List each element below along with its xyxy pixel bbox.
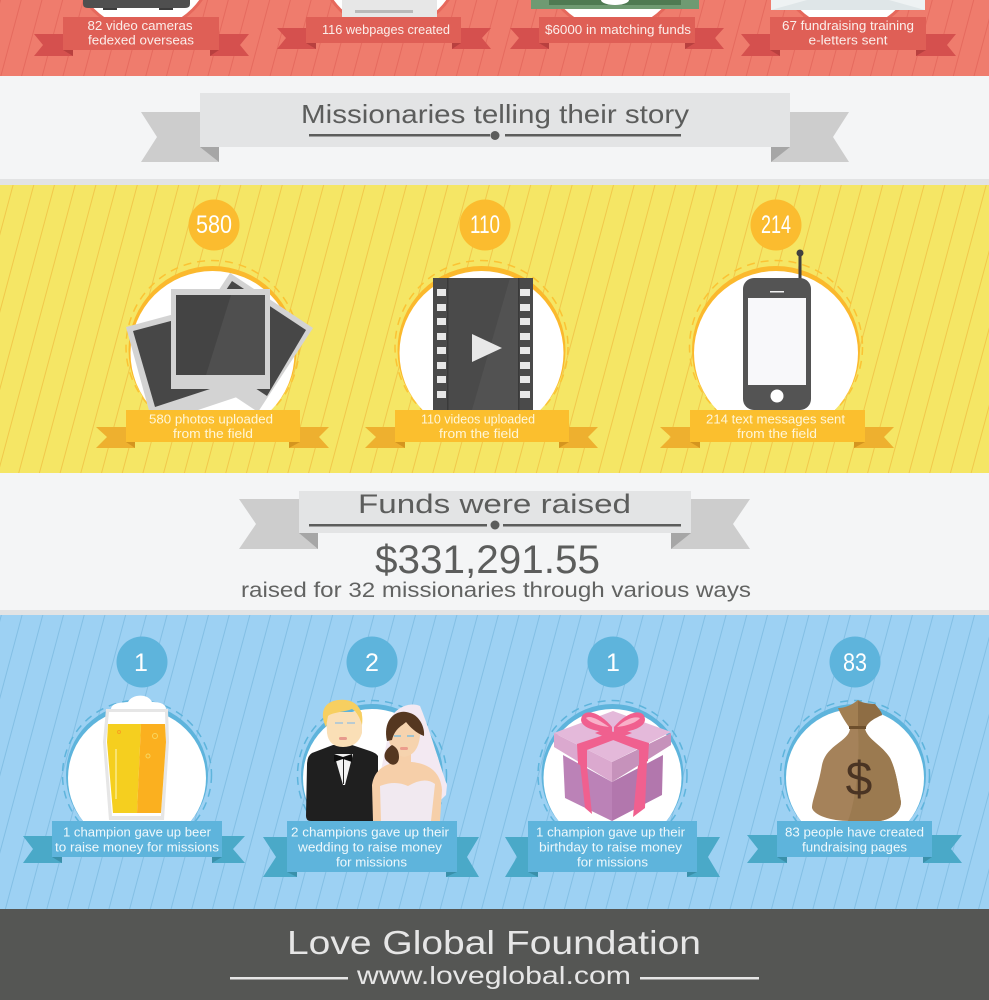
item: webpages [277,0,491,49]
item: gave up beer: 1 champion gave up beer [63,826,211,840]
icon: pint of beer [103,696,169,820]
item: gave up beer: to raise money for missions [55,840,219,854]
item: gave up wedding: for missions [336,856,407,870]
divider band [0,610,989,615]
item: gave up birthday [505,636,720,877]
item: photos: 580 photos uploaded [149,412,273,426]
item: photos [96,200,329,448]
item: videos: from the field [439,427,519,441]
item: video cameras [34,0,249,56]
icon: film strip with play button [433,278,533,410]
icon: money bag [812,700,901,821]
item: gave up birthday: for missions [577,856,648,870]
icon: money bag: $ [846,753,872,806]
heading ribbon: funds were raised: Funds were raised [358,489,631,519]
item: gave up beer: 1 [134,649,148,677]
icon: bride and groom [306,700,447,821]
item: text messages: 214 text messages sent [706,412,846,426]
item: training e-letters [741,0,956,56]
icon: mobile phone [743,250,811,410]
item: videos: 110 [470,211,500,239]
item: videos [365,200,598,448]
item: photos: 580 [196,211,232,239]
item: video cameras: 82 video cameras [88,19,192,33]
total raised caption: raised for 32 missionaries through various ways [241,579,751,602]
divider band [0,179,989,185]
item: videos: 110 videos uploaded [421,412,535,426]
heading ribbon: funds were raised [239,489,750,549]
item: fundraising pages [747,636,962,863]
item: text messages: from the field [737,427,817,441]
total raised amount: $331,291.55 [375,538,600,582]
item: gave up birthday: birthday to raise money [539,840,683,854]
item: gave up birthday: 1 champion gave up their [536,826,685,840]
item: gave up birthday: 1 [606,649,620,677]
item: photos: from the field [173,427,253,441]
icon: stacked photographs [126,273,313,425]
item: text messages: 214 [761,211,791,239]
panel: blue ways funds were raised [0,615,989,909]
item: video cameras: fedexed overseas [88,34,194,48]
item: gave up wedding: 2 [365,649,379,677]
item: matching funds [510,0,724,49]
icon: gift box [554,711,671,821]
item: text messages [660,200,894,448]
footer: organisation name and website [0,909,989,1000]
heading ribbon: missionaries telling their story: Missionaries telling their story [301,99,689,129]
item: webpages: 116 webpages created [322,23,450,37]
item: fundraising pages: fundraising pages [802,840,907,854]
item: fundraising pages: 83 people have created [785,826,924,840]
footer: organisation name and website: Love Global Foundation [287,924,701,961]
panel: yellow stories from the field [0,185,989,473]
item: gave up wedding [263,636,479,877]
panel: red fundraising tools [0,0,989,76]
item: gave up beer [23,636,245,863]
footer: organisation name and website: www.loveglobal.com [356,962,631,990]
item: training e-letters: 67 fundraising training [782,19,914,33]
item: matching funds: $6000 in matching funds [545,23,691,37]
item: fundraising pages: 83 [843,649,867,677]
item: gave up wedding: 2 champions gave up their [291,826,449,840]
item: training e-letters: e-letters sent [808,34,888,48]
item: gave up wedding: wedding to raise money [297,840,443,854]
heading ribbon: missionaries telling their story [141,93,849,162]
